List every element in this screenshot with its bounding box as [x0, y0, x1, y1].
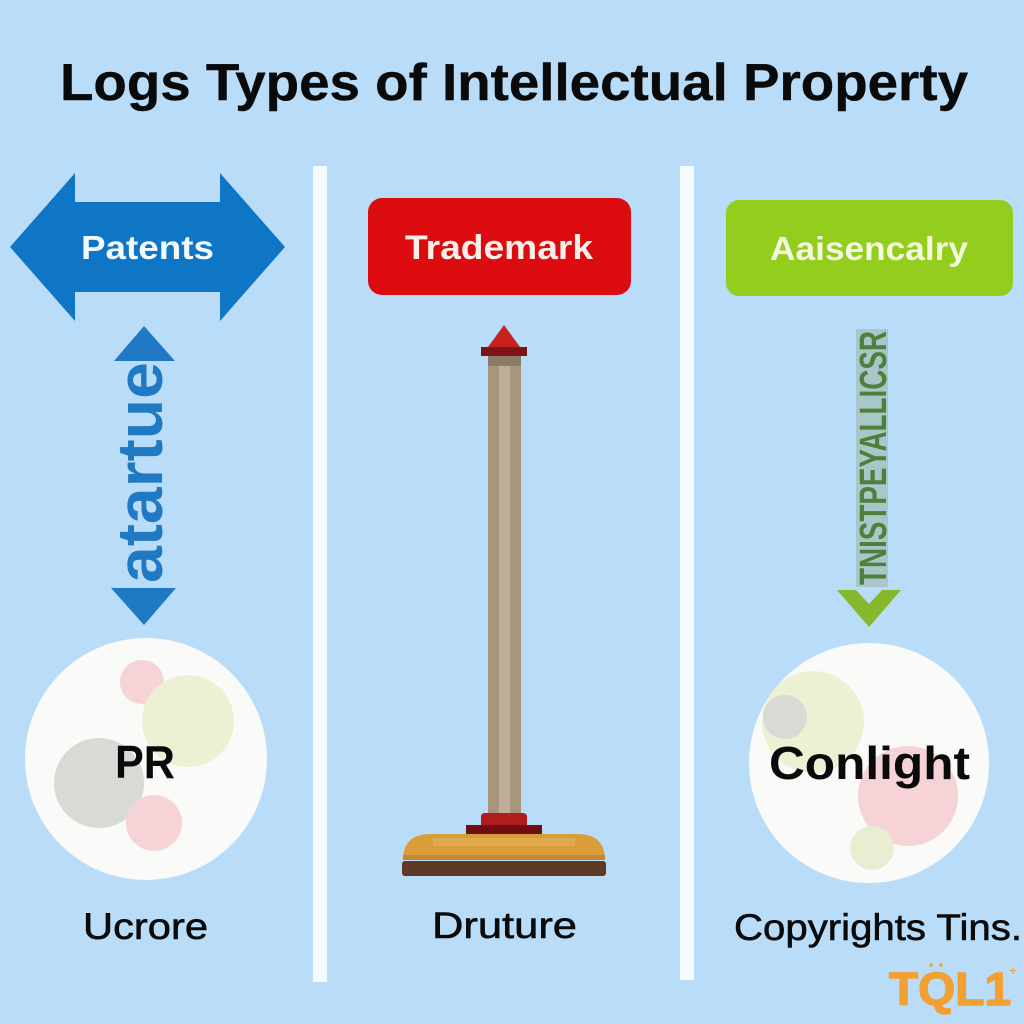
icon: pillar on base — [402, 325, 606, 876]
circle: Conlight: Conlight — [769, 737, 970, 789]
caption: Druture: Druture — [432, 905, 577, 946]
circle: PR: PR — [115, 736, 175, 788]
vertical double arrow with rotated label: atartue — [104, 362, 176, 583]
panel: copyrights — [726, 200, 1022, 948]
logo: TQL1: TQL1 — [889, 963, 1011, 1015]
panel: patents — [10, 173, 285, 947]
column divider left — [313, 166, 327, 982]
heading: patents double arrow: Patents — [81, 229, 214, 266]
panel: trademark — [368, 198, 631, 946]
caption: Copyrights Tins.: Copyrights Tins. — [734, 907, 1022, 948]
heading: green box: Aaisencalry — [770, 230, 969, 267]
circle: Conlight — [749, 643, 989, 883]
heading: green box — [726, 200, 1013, 296]
vertical down arrow with rotated label — [837, 329, 901, 627]
logo: TQL1: + — [1009, 962, 1017, 978]
column divider right — [680, 166, 694, 980]
heading: trademark box — [368, 198, 631, 295]
vertical down arrow with rotated label: TNISTPEYALLICSR — [853, 331, 895, 585]
circle: PR — [25, 638, 267, 880]
heading: trademark box: Trademark — [405, 229, 593, 267]
title: Logs Types of Intellectual Property — [60, 54, 968, 112]
caption: Ucrore: Ucrore — [83, 906, 208, 947]
heading: patents double arrow — [10, 173, 285, 321]
